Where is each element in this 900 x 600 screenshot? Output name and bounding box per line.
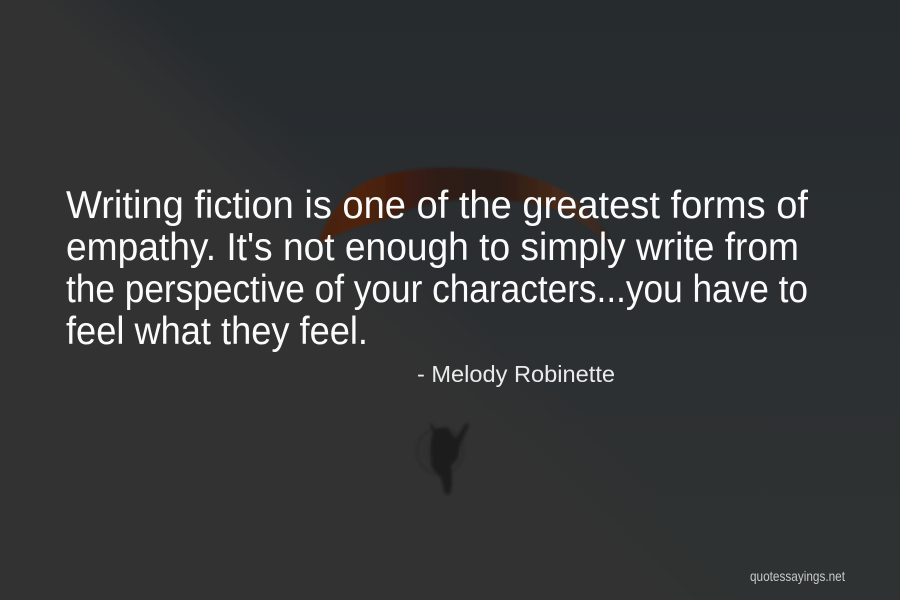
- attribution: - Melody Robinette: [417, 361, 615, 387]
- quote line 3: the perspective of your characters...you have to: [66, 268, 808, 311]
- propeller cage: [417, 428, 463, 474]
- watermark: quotessayings.net: [750, 568, 845, 584]
- paraglider pilot and propeller cage: [417, 423, 469, 494]
- pilot body: [430, 427, 460, 494]
- quote line 1: Writing fiction is one of the greatest forms of: [66, 184, 808, 227]
- quote line 4: feel what they feel.: [66, 310, 368, 353]
- suspension strut: [431, 424, 437, 438]
- quote line 2: empathy. It's not enough to simply write from: [66, 226, 799, 269]
- paraglider canopy: [318, 168, 619, 264]
- quote text: [66, 184, 808, 353]
- pilot arm: [450, 423, 469, 452]
